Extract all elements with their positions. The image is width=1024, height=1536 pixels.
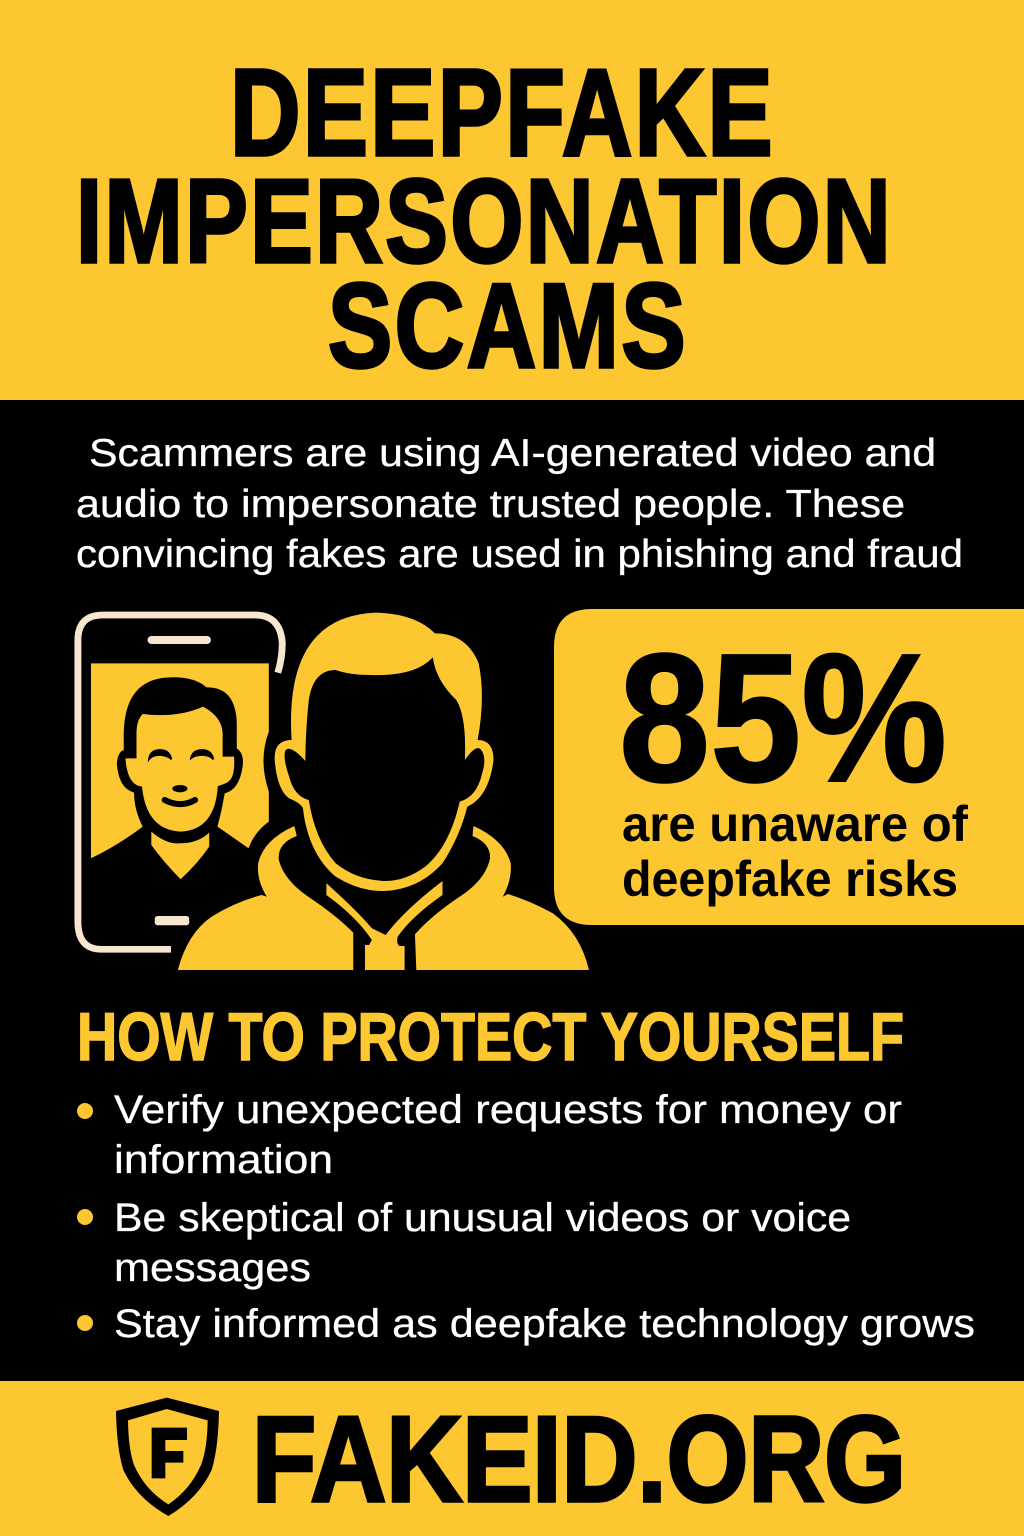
- stat number: 85%: [619, 615, 947, 820]
- panel: 85% statistic: [554, 609, 1024, 925]
- protection tips list: [77, 1088, 975, 1346]
- icon: faceless person in hoodie: [178, 613, 589, 970]
- footer banner: [0, 1381, 1024, 1536]
- footer website name: FAKEID.ORG: [252, 1391, 906, 1527]
- intro text: Scammers are using AI-generated video and: [89, 432, 936, 475]
- tip 2: messages: [114, 1246, 311, 1290]
- title: [76, 45, 893, 393]
- illustration: phone and faceless person: [78, 613, 589, 970]
- intro text: convincing fakes are used in phishing and fraud: [76, 533, 963, 576]
- title: SCAMS: [328, 259, 688, 393]
- tip 2: [77, 1196, 851, 1290]
- intro text: audio to impersonate trusted people. These: [76, 483, 905, 526]
- icon: shield logo: [116, 1398, 219, 1516]
- tip 1: Verify unexpected requests for money or: [114, 1088, 902, 1132]
- tip 2: Be skeptical of unusual videos or voice: [114, 1196, 851, 1240]
- stat caption: [622, 796, 968, 907]
- tip 1: information: [114, 1138, 333, 1182]
- icon: phone with face on screen: [78, 615, 282, 949]
- title: DEEPFAKE: [230, 45, 775, 182]
- title banner: [0, 0, 1024, 400]
- tip 1: [77, 1088, 902, 1182]
- stat caption: are unaware of: [622, 796, 968, 852]
- tip 3: Stay informed as deepfake technology grows: [114, 1302, 975, 1346]
- stat caption: deepfake risks: [622, 851, 958, 907]
- intro text: [76, 432, 963, 576]
